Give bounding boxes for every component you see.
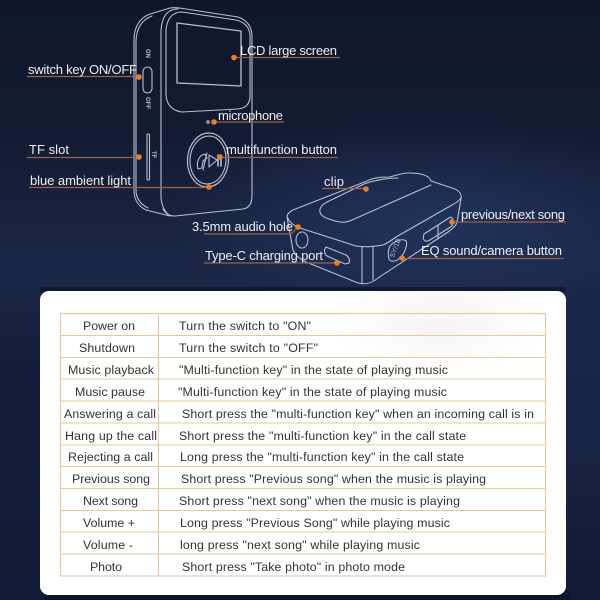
EQ camera key <box>388 240 407 261</box>
callout labels: blue ambient light <box>30 173 131 188</box>
side key markings: TF <box>150 151 156 159</box>
operation instructions column: Long press the "multi-function key" in the call state <box>180 450 464 464</box>
operation instructions column: Turn the switch to "ON" <box>179 319 311 333</box>
function table grid <box>60 314 546 576</box>
callout labels: LCD large screen <box>240 43 337 58</box>
function names column <box>64 319 157 574</box>
callout labels <box>28 43 565 263</box>
callout labels: switch key ON/OFF <box>28 62 137 77</box>
function names column: Shutdown <box>79 341 135 355</box>
operation instructions column: Turn the switch to "OFF" <box>179 341 318 355</box>
previous and next keys <box>423 217 453 241</box>
white instruction panel <box>40 265 566 595</box>
function names column: Volume + <box>83 516 135 530</box>
function names column: Volume - <box>83 538 133 552</box>
charging port <box>325 247 349 264</box>
side key markings: OFF <box>144 97 150 109</box>
callout labels: multifunction button <box>226 142 337 157</box>
operation instructions column: Short press "Take photo" in photo mode <box>182 560 405 574</box>
function names column: Next song <box>83 494 138 508</box>
TF slot <box>147 134 150 180</box>
function names column: Previous song <box>72 472 150 486</box>
function names column: Answering a call <box>64 407 156 421</box>
operation instructions column: "Multi-function key" in the state of playing music <box>178 385 447 399</box>
multifunction button <box>186 132 230 188</box>
side key markings <box>144 49 156 159</box>
function names column: Hang up the call <box>65 429 157 443</box>
operation instructions column <box>178 319 534 574</box>
side key markings: ON <box>144 49 150 58</box>
callout labels: Type-C charging port <box>205 248 323 263</box>
callout labels: EQ sound/camera button <box>421 243 562 258</box>
screen bezel <box>166 12 250 112</box>
operation instructions column: Long press "Previous Song" while playing music <box>180 516 450 530</box>
clip <box>320 178 431 222</box>
operation instructions column: Short press the "multi-function key" when an incoming call is in <box>182 407 534 421</box>
audio jack <box>296 232 308 248</box>
player device front view <box>134 8 252 216</box>
slide switch <box>143 67 152 93</box>
function names column: Power on <box>83 319 135 333</box>
function names column: Music pause <box>75 385 145 399</box>
operation instructions column: Short press "Previous song" when the music is playing <box>181 472 486 486</box>
earbud case device view <box>287 173 461 284</box>
callout labels: previous/next song <box>461 207 565 222</box>
function names column: Photo <box>90 560 122 574</box>
microphone hole <box>207 121 209 123</box>
play and phone glyphs <box>197 153 217 170</box>
operation instructions column: Short press the "multi-function key" in the call state <box>179 429 466 443</box>
callout lines and dots <box>27 55 566 266</box>
callout labels: clip <box>324 174 344 189</box>
function names column: Rejecting a call <box>68 450 153 464</box>
operation instructions column: Short press "next song" when the music is playing <box>179 494 460 508</box>
callout labels: TF slot <box>29 142 69 157</box>
LCD screen <box>177 23 241 86</box>
operation instructions column: "Multi-function key" in the state of playing music <box>179 363 448 377</box>
callout labels: microphone <box>218 108 283 123</box>
operation instructions column: long press "next song" while playing music <box>180 538 420 552</box>
EQ key marking: SY/1B <box>389 237 403 259</box>
callout labels: 3.5mm audio hole <box>192 219 293 234</box>
function names column: Music playback <box>68 363 155 377</box>
